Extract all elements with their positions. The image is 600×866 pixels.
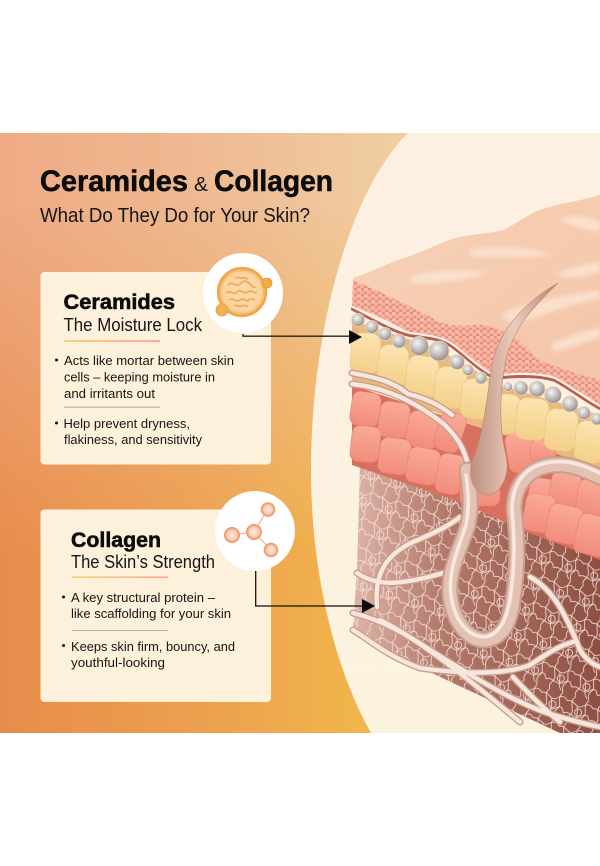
bullet: prevent dryness: [55, 416, 202, 447]
yellow fat cells: [349, 332, 600, 464]
bullet: structural protein: like scaffolding for your skin: [71, 606, 231, 621]
silver spheres: [352, 314, 600, 425]
arrow: collagen to skin: [256, 570, 375, 613]
subtitle: What Do They Do for Your Skin?: [40, 204, 310, 227]
bullet: structural protein: A key structural protein –: [71, 590, 216, 605]
background panel: [0, 133, 420, 733]
collagen mesh layer: [353, 468, 600, 733]
heading: ceramides: Ceramides: [64, 291, 175, 314]
subheading: the skin's strength: The Skin’s Strength: [71, 552, 215, 572]
bullet: mortar: Acts like mortar between skin: [64, 353, 234, 368]
title: [40, 165, 333, 198]
surface highlights: [410, 216, 600, 352]
silver membrane line: [353, 307, 600, 408]
bullet: mortar: and irritants out: [64, 386, 155, 401]
bullet: mortar: [55, 353, 234, 401]
panel: ceramides: [40, 272, 271, 464]
bullet: mortar: cells – keeping moisture in: [64, 370, 215, 384]
hair shaft and bulb: [471, 283, 558, 495]
icon: ceramide capsule: [203, 253, 283, 333]
bullet: firm and bouncy: Keeps skin firm, bouncy, and: [71, 639, 235, 654]
title: Ceramides: [40, 165, 188, 198]
bullet: firm and bouncy: youthful-looking: [71, 655, 165, 670]
panel: collagen: [40, 510, 271, 702]
bullet: prevent dryness: flakiness, and sensitivity: [64, 432, 202, 447]
cell layer backing: [352, 385, 600, 560]
skin cross-section illustration: [340, 195, 600, 740]
arrow: ceramides to skin: [243, 330, 362, 344]
subheading: the moisture lock: The Moisture Lock: [64, 315, 203, 335]
pink muscle cells: [349, 390, 600, 559]
connective fibres: [352, 373, 600, 727]
icon: collagen molecule: [215, 491, 295, 571]
top skin surface: [353, 195, 600, 380]
title: Collagen: [214, 165, 333, 198]
pink bumpy layer: [352, 280, 600, 405]
bullet: prevent dryness: Help prevent dryness,: [64, 416, 190, 431]
hair follicle tube: [450, 462, 600, 640]
bullet: firm and bouncy: [62, 639, 235, 670]
bullet: structural protein: [62, 590, 231, 621]
cream curved background: [311, 133, 600, 733]
heading: collagen: Collagen: [71, 529, 161, 552]
title: &: [194, 174, 209, 196]
